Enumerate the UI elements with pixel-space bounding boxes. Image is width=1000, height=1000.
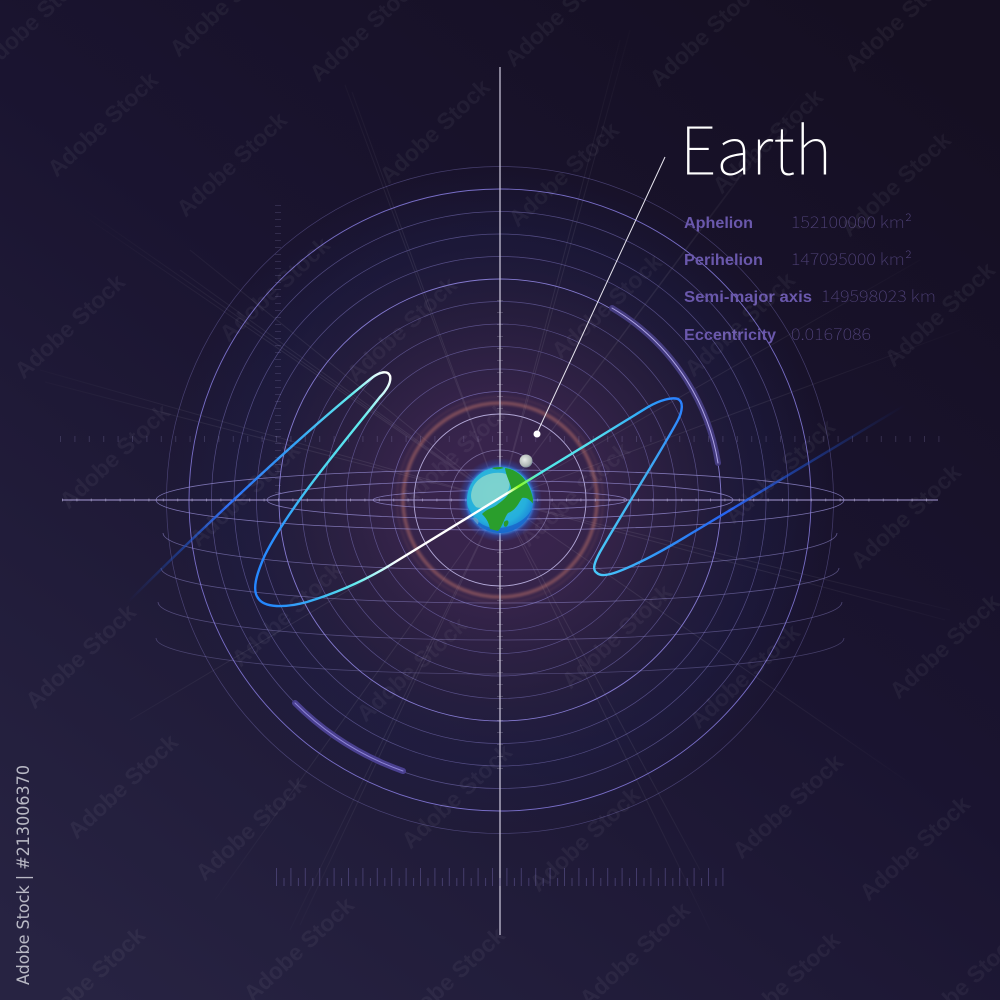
row: semi-major axis: 149598023 km [821, 283, 936, 307]
icon: moon [520, 454, 532, 468]
vertical axis [499, 67, 501, 935]
orange halo ring [397, 397, 603, 603]
vertical tick column left [275, 205, 281, 500]
row: perihelion: 147095000 km² [791, 246, 912, 270]
stock id label: Adobe Stock | #213006370 [14, 765, 33, 985]
highlight arc: upper right [612, 308, 718, 463]
stock watermarks: Adobe Stock [684, 619, 805, 734]
row: eccentricity: Eccentricity [684, 327, 776, 344]
data table [684, 209, 936, 345]
stock watermarks: Adobe Stock [9, 269, 130, 384]
leader line [537, 157, 665, 433]
perspective ellipses [156, 470, 844, 674]
stock watermarks: Adobe Stock [54, 399, 175, 514]
stock watermarks: Adobe Stock [214, 232, 335, 347]
stock watermarks: Adobe Stock [845, 459, 966, 574]
stock watermarks: Adobe Stock [835, 127, 956, 242]
stock watermarks: Adobe Stock [341, 272, 462, 387]
row: semi-major axis [684, 283, 936, 307]
stock watermarks: Adobe Stock [546, 249, 667, 364]
stock watermarks: Adobe Stock [351, 612, 472, 727]
bottom ruler [276, 877, 724, 882]
stock watermarks: Adobe Stock [707, 84, 828, 199]
row: eccentricity [684, 321, 871, 345]
stock watermarks: Adobe Stock [374, 74, 495, 189]
leader dot [534, 430, 540, 438]
tick row upper [60, 436, 940, 442]
concentric orbit rings [166, 166, 834, 834]
stock watermarks: Adobe Stock [396, 739, 517, 854]
stock watermarks: Adobe Stock [727, 749, 848, 864]
stock watermarks: Adobe Stock [879, 257, 1000, 372]
stock watermarks: Adobe Stock [679, 267, 800, 382]
row: perihelion [684, 246, 912, 270]
stock watermarks: Adobe Stock [20, 599, 141, 714]
stock watermarks: Adobe Stock [514, 437, 635, 552]
stock watermarks: Adobe Stock [226, 557, 347, 672]
stock watermarks: Adobe Stock [62, 729, 183, 844]
icon: earth [467, 467, 533, 533]
central glow [170, 170, 830, 830]
row: aphelion: 152100000 km² [791, 209, 912, 233]
title: Earth [680, 98, 832, 194]
stock watermarks: Adobe Stock [394, 397, 515, 512]
row: semi-major axis: Semi-major axis [684, 289, 812, 306]
highlight arc: lower left [295, 703, 403, 771]
row: perihelion: Perihelion [684, 252, 763, 269]
stock watermarks: Adobe Stock [184, 437, 305, 552]
stock watermarks: Adobe Stock [190, 771, 311, 886]
stock watermarks: Adobe Stock [42, 67, 163, 182]
horizontal axis [62, 499, 938, 501]
stock watermarks: Adobe Stock [854, 791, 975, 906]
stock watermarks: Adobe Stock [503, 117, 624, 232]
row: eccentricity: 0.0167086 [791, 321, 871, 345]
orbit path [128, 372, 905, 606]
icon: earth glow [458, 458, 542, 542]
stock watermarks: Adobe Stock [524, 782, 645, 897]
row: aphelion [684, 209, 912, 233]
stock watermarks: Adobe Stock [719, 414, 840, 529]
stock watermarks: Adobe Stock [556, 579, 677, 694]
row: aphelion: Aphelion [684, 215, 753, 232]
stock watermarks: Adobe Stock [171, 107, 292, 222]
